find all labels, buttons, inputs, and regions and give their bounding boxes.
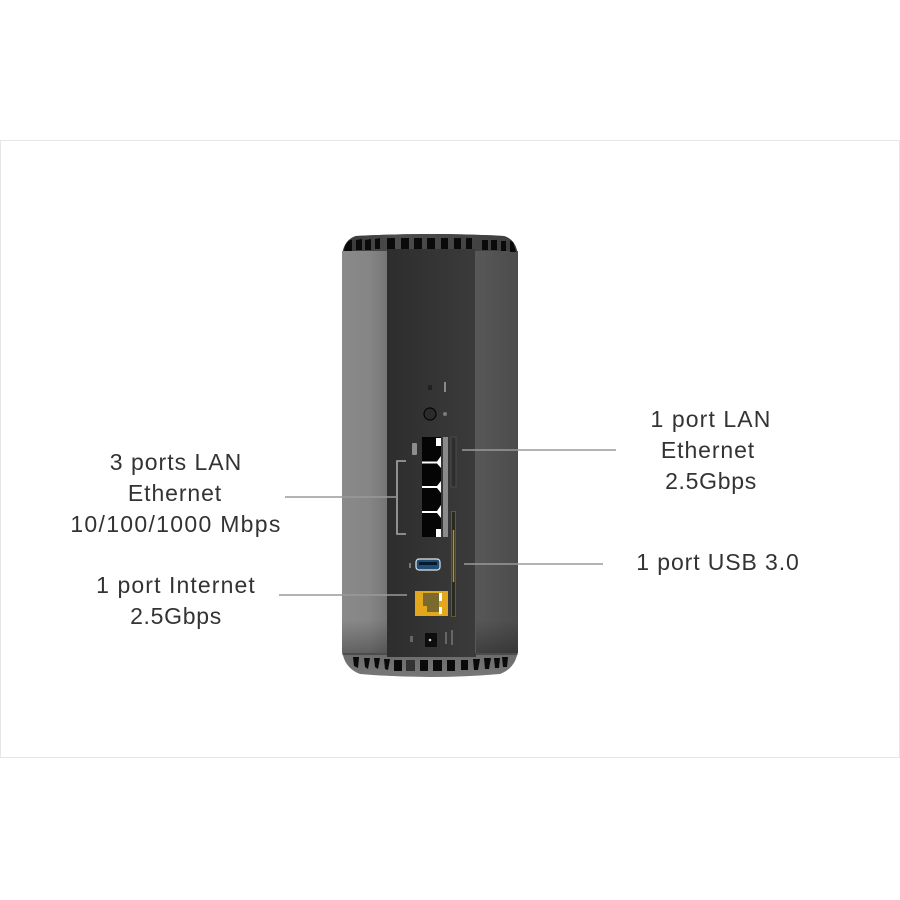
callout: 1 port LAN: 2.5Gbps (665, 468, 757, 494)
power jack (410, 630, 453, 647)
callout: 1 port LAN (462, 406, 771, 494)
USB port (409, 559, 440, 570)
callout: 3 ports LAN: 3 ports LAN (110, 449, 242, 475)
callout: 1 port Internet (96, 572, 407, 629)
callout: 1 port LAN: Ethernet (661, 437, 755, 463)
callout: 1 port LAN: 1 port LAN (651, 406, 771, 432)
bottom vents (353, 657, 508, 671)
callout: 1 port USB: 1 port USB 3.0 (636, 549, 800, 575)
frame: image border (0, 140, 900, 758)
callout: 3 ports LAN (70, 449, 406, 537)
callout: 1 port Internet: 1 port Internet (96, 572, 256, 598)
callout: 3 ports LAN: Ethernet (128, 480, 222, 506)
router device (342, 234, 518, 677)
LAN ports (412, 437, 456, 537)
callout: 3 ports LAN: 10/100/1000 Mbps (70, 511, 282, 537)
callout: 1 port Internet: 2.5Gbps (130, 603, 222, 629)
reset button and LED (424, 382, 447, 420)
router body (342, 234, 518, 677)
yellow label strip (452, 512, 456, 616)
top vents (344, 238, 516, 252)
Internet port (415, 591, 448, 616)
